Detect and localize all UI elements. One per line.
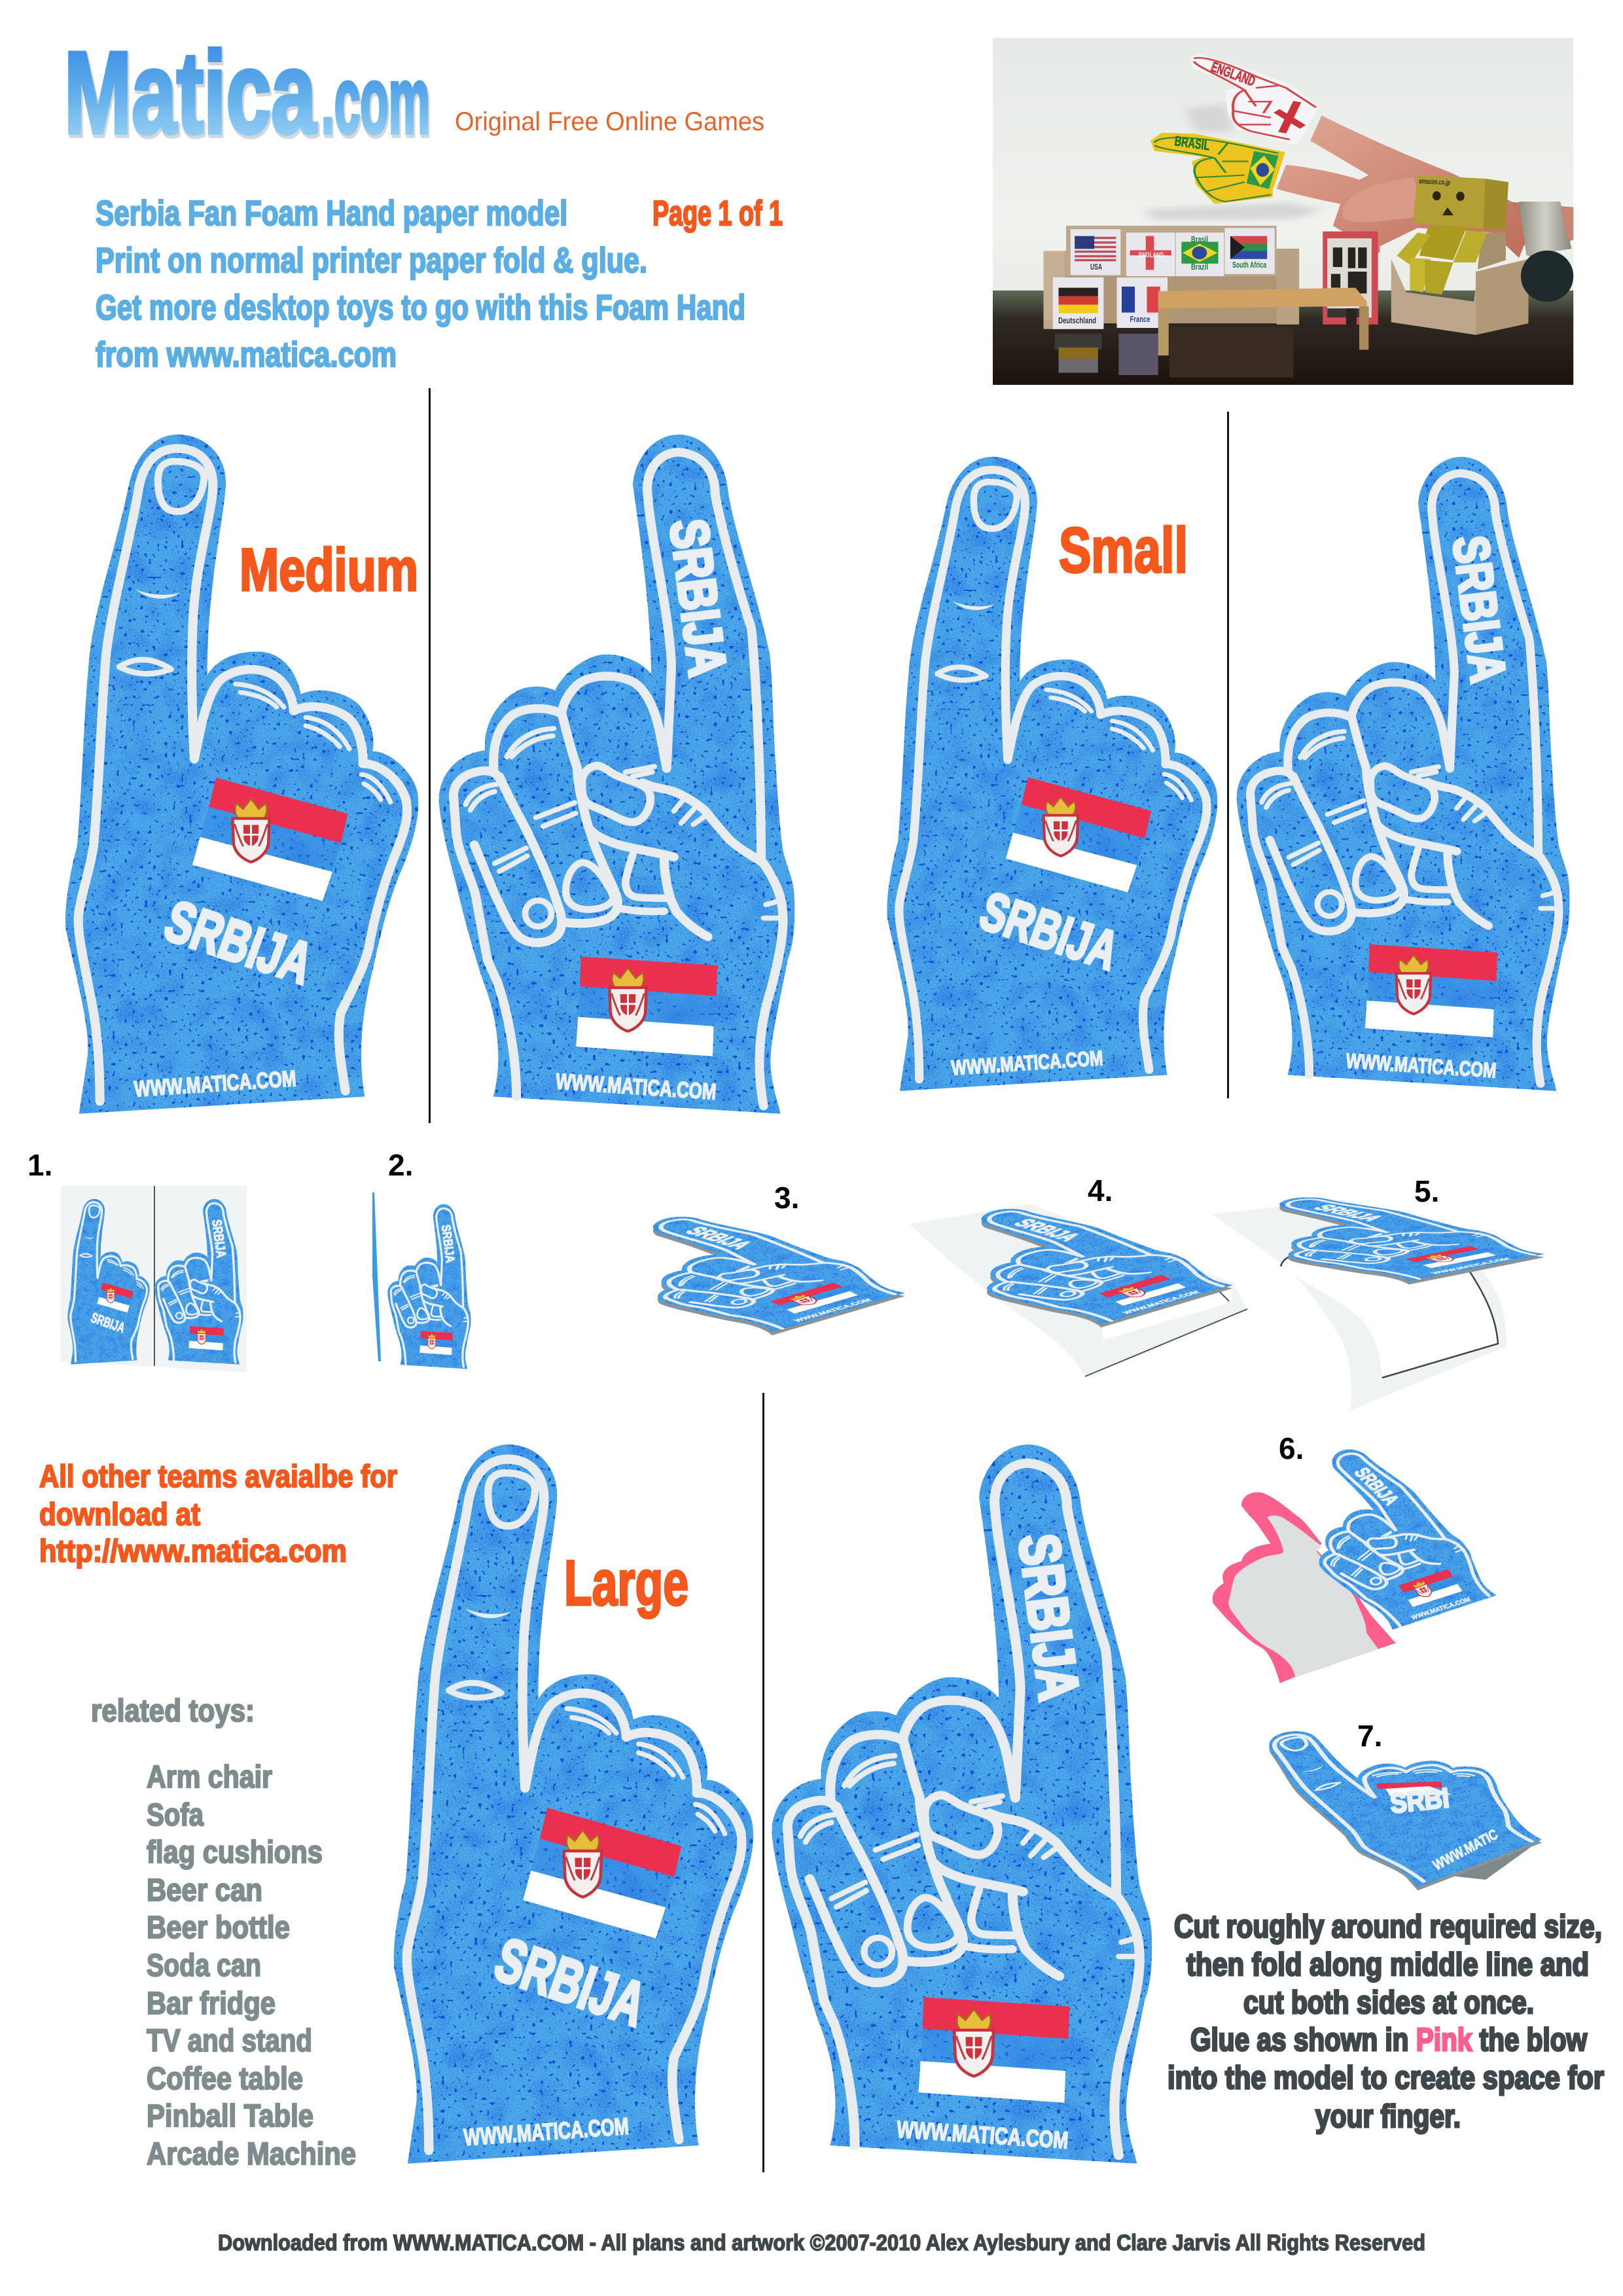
hand shadow (885, 1198, 1239, 1338)
base text: WWW.MATIC (1431, 1826, 1501, 1873)
hand: small front: WWW.MATICA.COM (1346, 1049, 1497, 1082)
note: other teams: All other teams avaialbe for (39, 1460, 397, 1494)
step 7 (1230, 1696, 1571, 1893)
paper sheet (910, 1204, 1247, 1376)
related toys list: Coffee table (147, 2062, 303, 2096)
open model underside (1450, 1839, 1542, 1880)
step 2 (372, 1148, 471, 1369)
text: .com (323, 50, 431, 156)
related toys list: related toys: (91, 1694, 255, 1729)
hand: medium back: WWW.MATICA.COM (134, 1067, 297, 1102)
hand: medium front (439, 435, 794, 1114)
hand: large back (394, 1444, 753, 2164)
instructions text: your finger. (1315, 2099, 1461, 2134)
related toys list: Sofa (147, 1798, 204, 1833)
intro text block: Serbia Fan Foam Hand paper model (96, 194, 567, 233)
paper sheet (61, 1186, 247, 1372)
related toys list (91, 1694, 356, 2172)
cushion labels: Brasil (1191, 234, 1208, 244)
step number 1: 1. (27, 1148, 52, 1182)
step 1 (27, 1148, 247, 1372)
instructions text (1168, 1909, 1604, 2134)
hand: small back: SRBIJA (973, 880, 1126, 981)
label: Medium: Medium (240, 537, 418, 603)
cushion labels: USA (1090, 262, 1102, 272)
curled paper (1212, 1200, 1507, 1410)
flattened flag (1376, 1782, 1442, 1789)
unfolded back hand: SRBIJA (89, 1310, 127, 1336)
related toys list: Arcade Machine (147, 2137, 356, 2172)
perspective hand on curled paper (1181, 1187, 1551, 1288)
hand: small front (1237, 457, 1569, 1091)
divider: medium (429, 388, 431, 1123)
intro text block: Print on normal printer paper fold & glue. (96, 241, 647, 280)
cushion labels (1058, 234, 1267, 325)
logo: Matica.com: Matica (64, 27, 317, 158)
folded sliver (372, 1193, 381, 1361)
step number 3: 3. (774, 1181, 799, 1215)
hand laid over glue shape: SRBIJA (1349, 1465, 1404, 1508)
related toys list: TV and stand (147, 2024, 312, 2058)
intro text block (96, 194, 745, 374)
tagline: Original Free Online Games (455, 107, 764, 136)
hand shadow (1230, 1700, 1571, 1893)
step number 7: 7. (1357, 1719, 1382, 1753)
perspective hand: WWW.MATICA.COM (792, 1297, 873, 1323)
hand shadow (1181, 1191, 1551, 1291)
hand laid over glue shape: WWW.MATICA.COM (1410, 1596, 1472, 1621)
unfolded back hand (67, 1199, 150, 1365)
intro text block: from www.matica.com (96, 335, 397, 374)
instructions text: Glue as shown in Pink the blow (1190, 2022, 1588, 2058)
hand: large front: WWW.MATICA.COM (896, 2116, 1069, 2153)
page number: Page 1 of 1 (652, 194, 783, 233)
photo: finished foam hands on fingers with desktop toys (993, 38, 1573, 385)
text: .com (321, 48, 430, 153)
hand: large back: SRBIJA (487, 1925, 654, 2039)
related toys list: Bar fridge (147, 1986, 276, 2021)
related toys list: flag cushions (147, 1835, 323, 1870)
divider: large (762, 1393, 764, 2172)
unfolded front hand (154, 1199, 243, 1365)
hand: medium front: WWW.MATICA.COM (555, 1069, 717, 1105)
step 5 (1181, 1174, 1551, 1410)
hand: large back: WWW.MATICA.COM (463, 2113, 630, 2151)
step number 6: 6. (1279, 1431, 1304, 1465)
folded front hand (387, 1204, 471, 1369)
label: Small: Small (1059, 514, 1188, 586)
perspective hand: SRBIJA (680, 1225, 758, 1251)
step 6 (1213, 1431, 1501, 1683)
step number 4: 4. (1088, 1174, 1113, 1208)
cushion labels: Deutschland (1058, 315, 1096, 325)
related toys list: Beer bottle (147, 1910, 290, 1945)
related toys list: Arm chair (147, 1760, 272, 1795)
photo label: ENGLAND: ENGLAND (1209, 58, 1258, 90)
perspective hand (556, 1202, 911, 1342)
glue area in pink (1213, 1492, 1396, 1683)
related toys list: Soda can (147, 1948, 261, 1983)
cushion labels: ENGLAND (1139, 251, 1164, 259)
divider: small (1227, 412, 1229, 1098)
step number 2: 2. (388, 1148, 413, 1182)
flattened SRBIJA text: SRBI (1389, 1782, 1450, 1819)
perspective hand on paper: SRBIJA (1008, 1217, 1086, 1244)
hand: medium back (65, 435, 418, 1114)
hand: small front: SRBIJA (1442, 533, 1516, 685)
step 3 (556, 1181, 911, 1346)
footer credit: Downloaded from WWW.MATICA.COM - All plans and artwork ©2007-2010 Alex Aylesbury and Clare Jarvis All Rights Reserved (218, 2231, 1425, 2255)
logo: Matica.com: Matica (65, 30, 318, 160)
instructions text: cut both sides at once. (1243, 1985, 1534, 2020)
note: other teams: http://www.matica.com (39, 1534, 347, 1569)
hand: large front: SRBIJA (1007, 1531, 1092, 1704)
hand: small back: WWW.MATICA.COM (950, 1047, 1104, 1079)
step 4 (885, 1174, 1247, 1376)
perspective hand on curled paper: SRBIJA (1308, 1203, 1389, 1223)
hand: medium back: SRBIJA (157, 889, 321, 997)
label: Large: Large (564, 1547, 688, 1619)
cushion labels: South Africa (1232, 260, 1267, 270)
hand: large front (772, 1444, 1152, 2164)
hand shadow (556, 1206, 911, 1346)
hand: small back (887, 457, 1217, 1091)
folded front hand: SRBIJA (438, 1224, 457, 1264)
step number 5: 5. (1414, 1174, 1439, 1208)
unfolded front hand: SRBIJA (209, 1219, 228, 1259)
note: other teams (39, 1460, 397, 1569)
photo label: BRASIL: BRASIL (1173, 134, 1211, 153)
cushion labels: France (1130, 314, 1150, 324)
hand: medium front: SRBIJA (659, 516, 738, 679)
finished hand (1230, 1696, 1571, 1890)
hand laid over glue shape (1257, 1435, 1501, 1641)
note: other teams: download at (39, 1498, 200, 1532)
perspective hand on paper (885, 1194, 1239, 1335)
perspective hand on paper: WWW.MATICA.COM (1121, 1289, 1201, 1315)
intro text block: Get more desktop toys to go with this Foam Hand (96, 288, 745, 327)
cushion labels: Brazil (1191, 262, 1208, 272)
related toys list: Beer can (147, 1873, 262, 1908)
related toys list: Pinball Table (147, 2099, 313, 2134)
perspective hand on curled paper: WWW.MATICA.COM (1429, 1257, 1512, 1275)
photo label: amazon: amazon.co.jp (1419, 177, 1451, 187)
